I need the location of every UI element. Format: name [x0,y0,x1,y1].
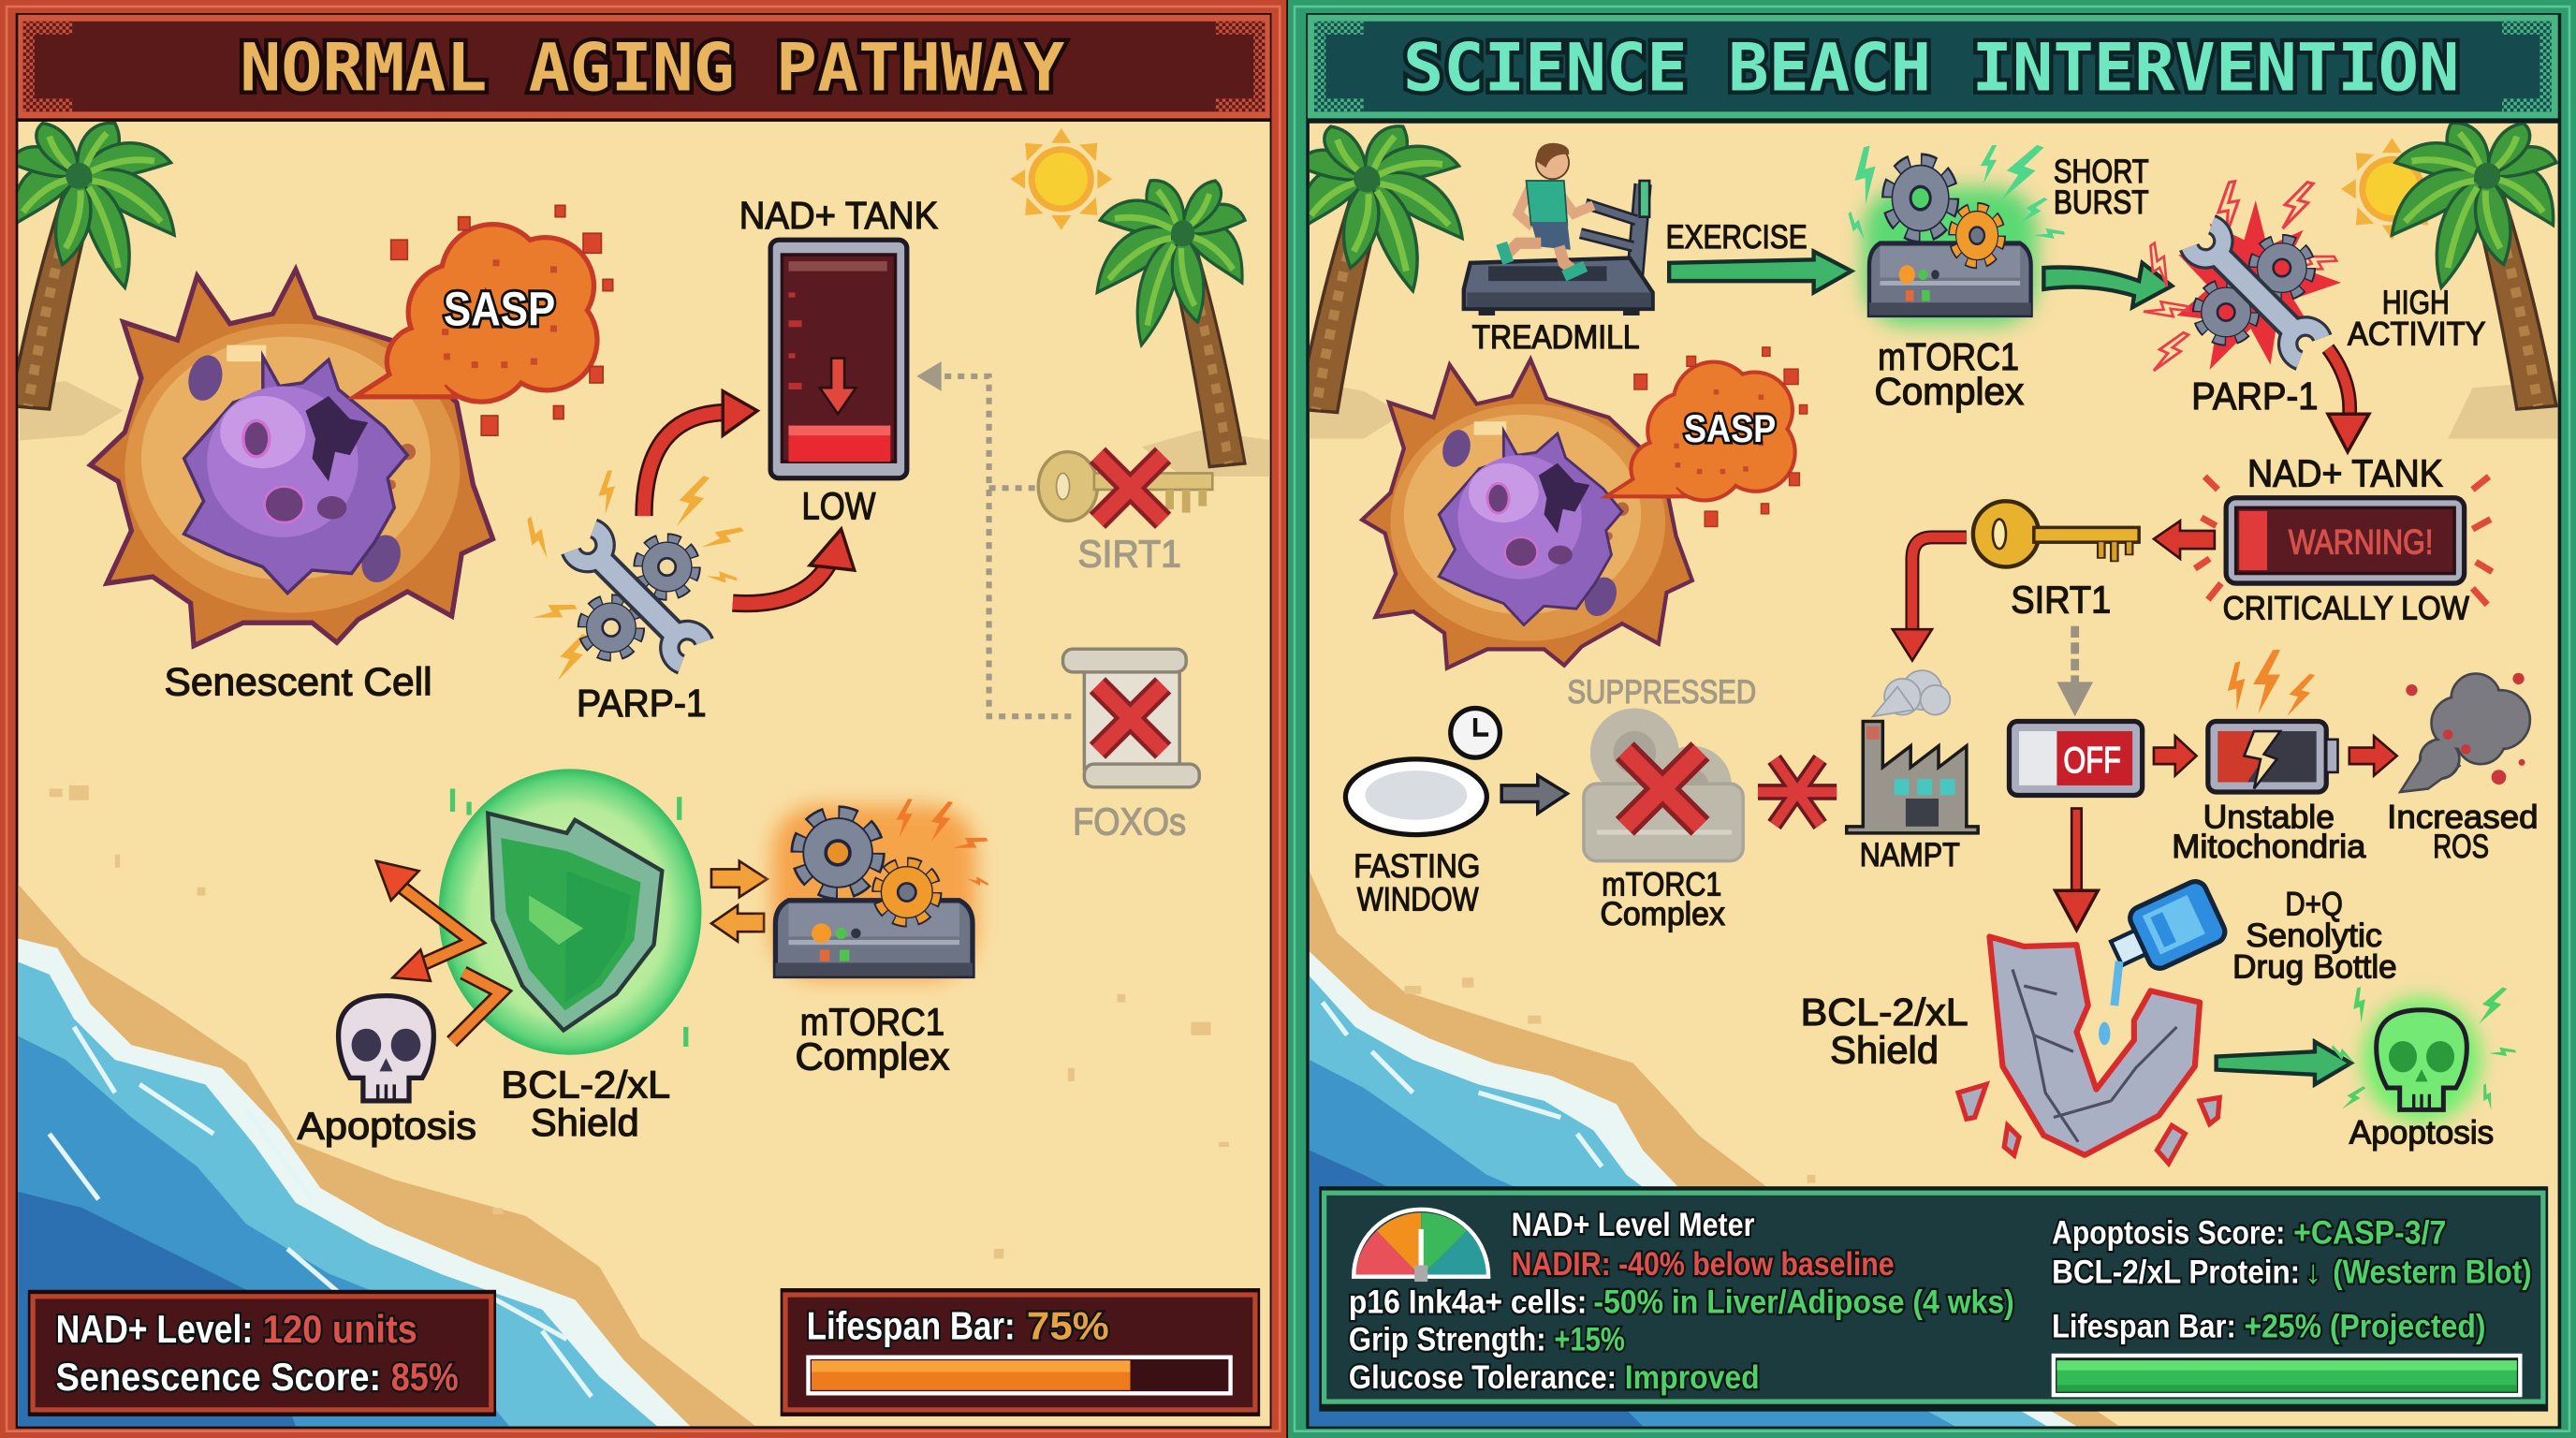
dotted arrow: suppressed inputs [916,361,1071,716]
icon: SIRT1 key crossed: SIRT1 [1077,533,1181,576]
stats box: lifespan bar 75%: Lifespan Bar: [807,1304,1016,1347]
BCL-2/xL shield in bubble [439,769,701,1144]
results panel: p16 Ink4a+ cells: [1349,1284,1587,1320]
PARP-1 wrench [518,470,744,725]
mTORC1 complex short burst [1842,139,2065,413]
red cross block [1758,759,1837,825]
results panel: Apoptosis Score: [2052,1215,2285,1252]
arrow: mitochondria to ROS [2349,736,2397,775]
arrow: exercise [1666,219,1852,292]
lifespan bar [2054,1356,2520,1395]
results panel: Grip Strength: [1349,1322,1546,1358]
stats box: NAD+ level and senescence: 120 units [263,1308,417,1351]
high activity label [2348,285,2485,353]
gauge: NAD+ level meter [1354,1210,1488,1282]
PARP-1 high activity wrench: PARP-1 [2191,374,2318,418]
senescent cell: Senescent Cell [165,660,432,703]
broken BCL-2/xL shield: Shield [1830,1029,1939,1072]
icon: palm tree right [1097,181,1245,466]
title: SCIENCE BEACH INTERVENTION [1403,30,2459,107]
arrows: shield and mTORC1 exchange [711,861,768,942]
icon: green skull apoptosis [2329,983,2516,1152]
icon: skull apoptosis [298,996,476,1147]
mTORC1 complex suppressed: mTORC1 [1602,867,1721,903]
results panel: Improved [1625,1359,1760,1396]
mTORC1 complex suppressed: SUPPRESSED [1567,674,1756,711]
mTORC1 complex suppressed: Complex [1600,896,1725,932]
BCL-2/xL shield in bubble: BCL-2/xL [501,1063,670,1106]
icon: SIRT1 golden key [1973,501,2139,622]
beach background [1298,123,2558,1426]
mTORC1 complex hyperactive [772,800,988,1078]
results panel: -50% in Liver/Adipose (4 wks) [1593,1284,2014,1320]
arrow: dashed SIRT1 to off switch [2056,626,2093,716]
results panel: (Western Blot) [2333,1255,2532,1291]
stats box: lifespan bar 75%: 75% [1027,1304,1109,1347]
arrow: PARP-1 to NAD+ tank [2328,348,2369,452]
arrow: SIRT1 to NAMPT [1893,537,1967,661]
NAD+ tank critically low: WARNING! [2289,522,2433,561]
panel: normal aging pathway [0,0,1286,1438]
NAD+ tank critically low [2195,452,2492,627]
results panel: NADIR: -40% below baseline [1512,1246,1895,1283]
short burst label: SHORT [2054,154,2149,190]
ROS smoke cloud [2387,673,2539,865]
arrow: exercise: EXERCISE [1666,219,1808,256]
senescent cell [1362,360,1692,668]
arrow: PARP-1 to low [733,529,855,604]
icon: NAMPT factory [1847,670,1978,873]
mTORC1 complex short burst: Complex [1875,370,2024,413]
results panel: BCL-2/xL Protein: [2052,1255,2300,1291]
results panel: +CASP-3/7 [2293,1215,2446,1252]
NAD+ tank, low [739,194,938,528]
high activity label: HIGH [2382,285,2450,321]
treadmill with runner: TREADMILL [1472,319,1640,356]
icon: D+Q senolytic drug bottle: Drug Bottle [2232,948,2397,985]
stats box: NAD+ level and senescence: NAD+ Level: [56,1308,253,1351]
fasting window plate and clock [1345,708,1500,917]
icon: palm tree right [2392,123,2556,409]
icon: D+Q senolytic drug bottle: Senolytic [2246,917,2382,954]
NAD+ tank, low: LOW [801,485,875,528]
short burst label: BURST [2054,184,2149,221]
stats box: NAD+ level and senescence: 85% [391,1356,459,1399]
results panel: Glucose Tolerance: [1349,1359,1617,1396]
icon: FOXOs scroll crossed: FOXOs [1073,800,1186,844]
results panel: NAD+ Level Meter [1512,1207,1755,1243]
results panel: +25% (Projected) [2244,1309,2485,1345]
stats box: lifespan bar 75% [781,1288,1260,1416]
unstable mitochondria battery [2172,650,2366,865]
SASP cloud: SASP [1684,406,1776,450]
arrow: tank to SIRT1 [2154,521,2215,559]
NAD+ tank, low: NAD+ TANK [739,194,938,237]
icon: D+Q senolytic drug bottle: D+Q [2285,887,2343,923]
stats box: NAD+ level and senescence [28,1290,496,1416]
icon: FOXOs scroll crossed [1063,649,1199,844]
header: science beach intervention [1308,15,2558,118]
mTORC1 complex hyperactive: mTORC1 [800,1001,944,1044]
header: normal aging pathway [18,15,1270,118]
arrow: deflected orange arrows [376,861,501,1042]
icon: skull apoptosis: Apoptosis [298,1104,476,1147]
mTORC1 complex suppressed [1567,674,1756,932]
NAD+ tank critically low: NAD+ TANK [2247,452,2443,495]
senescent cell [91,270,493,703]
title: NORMAL AGING PATHWAY [240,30,1064,107]
PARP-1 high activity wrench [2140,178,2341,418]
arrow: PARP-1 to tank [644,391,757,516]
BCL-2/xL shield in bubble: Shield [531,1101,639,1144]
icon: green skull apoptosis: Apoptosis [2349,1115,2494,1152]
mTORC1 complex short burst: mTORC1 [1878,335,2019,378]
unstable mitochondria battery: Unstable [2203,800,2334,836]
arrow: off to shield [2056,809,2098,930]
icon: SIRT1 golden key: SIRT1 [2011,579,2111,622]
fasting window plate and clock: WINDOW [1357,881,1479,917]
arrow: fasting to suppressed mTORC1 [1501,775,1567,814]
SASP cloud [1613,347,1808,527]
panel: science beach intervention [1288,0,2576,1438]
icon: sun [1010,128,1112,230]
results panel [1319,1186,2548,1412]
arrow: mTORC1 to PARP-1 [2043,263,2172,307]
short burst label [2054,154,2149,221]
SASP cloud [363,205,613,435]
PARP-1 wrench: PARP-1 [577,682,707,725]
OFF switch: OFF [2063,741,2121,781]
results panel: ↓ [2305,1255,2321,1291]
beach background [10,122,1273,1426]
arrow: off to mitochondria [2154,736,2197,775]
arrow: shield to apoptosis [2217,1042,2351,1084]
broken BCL-2/xL shield: BCL-2/xL [1801,990,1969,1034]
unstable mitochondria battery: Mitochondria [2172,829,2366,865]
icon: palm tree left [1298,126,1462,413]
icon: D+Q senolytic drug bottle [2099,878,2397,1045]
OFF switch [2009,721,2143,795]
ROS smoke cloud: ROS [2433,829,2489,865]
treadmill with runner [1464,143,1653,356]
icon: sun [2341,139,2428,240]
broken BCL-2/xL shield [1801,936,2219,1164]
results panel: Lifespan Bar: [2052,1309,2236,1345]
NAD+ tank critically low: CRITICALLY LOW [2223,591,2469,627]
high activity label: ACTIVITY [2348,316,2485,353]
icon: SIRT1 key crossed [1038,452,1212,576]
results panel: +15% [1554,1322,1625,1358]
SASP cloud: SASP [444,283,555,336]
icon: palm tree left [10,123,174,409]
mTORC1 complex hyperactive: Complex [795,1035,949,1078]
ROS smoke cloud: Increased [2387,800,2539,836]
stats box: NAD+ level and senescence: Senescence Score: [56,1356,381,1399]
icon: NAMPT factory: NAMPT [1860,837,1960,873]
fasting window plate and clock: FASTING [1354,848,1480,885]
